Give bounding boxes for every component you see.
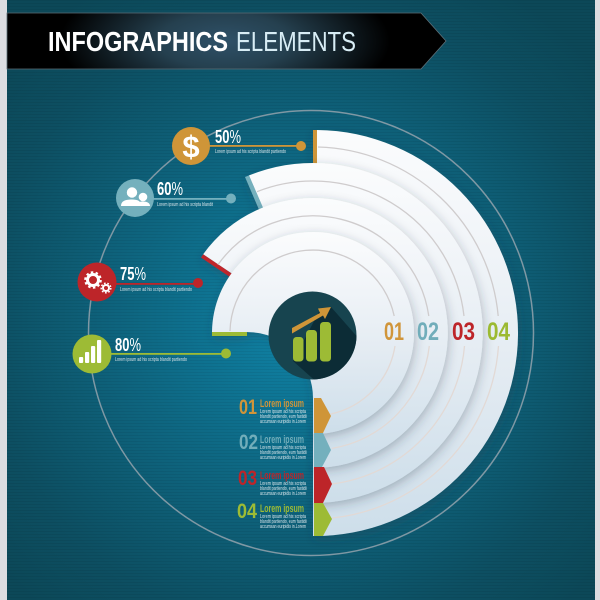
- callout: 75%: 75%: [120, 264, 146, 284]
- list item 01: Lorem ipsum: [260, 398, 304, 410]
- callout: 50%: $: [182, 129, 200, 164]
- list item 04: accumsan euripidis in.Lorem: [260, 524, 306, 530]
- list item 02: Lorem ipsum: [260, 434, 304, 446]
- ring number labels: 04: [487, 318, 510, 346]
- list item 02: blandit partiendo, eum fastidii: [260, 450, 307, 456]
- callout: 60%: [116, 179, 236, 217]
- list item 03: blandit partiendo, eum fastidii: [260, 486, 307, 492]
- callout: 60%: 60%: [157, 179, 183, 199]
- list item 04: [237, 500, 307, 530]
- callout: 75%: Lorem ipsum ad his scripta blandit partiendo: [120, 287, 192, 293]
- subtitle word: ELEMENTS: [236, 26, 356, 57]
- list item 01: blandit partiendo, eum fastidii: [260, 414, 307, 420]
- center icon: growth chart: [268, 292, 360, 385]
- ring 1: [212, 232, 414, 434]
- callout: 50%: 50%: [215, 127, 241, 147]
- title banner: [7, 13, 446, 69]
- list item 03: 03: [238, 467, 257, 490]
- list item 04: 04: [237, 500, 257, 523]
- list item 01: Lorem ipsum ad his scripta: [260, 409, 306, 415]
- list item 02: 02: [239, 431, 258, 454]
- list item 01: [239, 396, 307, 425]
- list item 01: accumsan euripidis in.Lorem: [260, 419, 306, 425]
- list item 04: Lorem ipsum ad his scripta: [260, 514, 306, 520]
- callout: 50%: Lorem ipsum ad his scripta blandit partiendo: [215, 149, 286, 155]
- list item 04: blandit partiendo, eum fastidii: [260, 519, 307, 525]
- list item 03: Lorem ipsum: [260, 470, 304, 482]
- ring 4: [313, 130, 518, 536]
- pointer tabs: [314, 398, 332, 536]
- list item 04: Lorem ipsum: [260, 503, 304, 515]
- ring 3: [245, 163, 483, 503]
- callout: 60%: Lorem ipsum ad his scripta blandit: [157, 202, 213, 208]
- outer thin circle: [88, 110, 534, 556]
- ring number labels: [384, 318, 510, 346]
- callout: 80%: 80%: [115, 335, 141, 355]
- list item 03: [238, 467, 307, 497]
- callout: 75%: [78, 262, 203, 302]
- callout: 50%: [172, 127, 306, 165]
- list item 02: [239, 431, 307, 461]
- callout: 80%: [72, 334, 231, 374]
- list item 01: 01: [239, 396, 257, 419]
- list item 02: Lorem ipsum ad his scripta: [260, 445, 306, 451]
- title: INFOGRAPHICS: [48, 26, 228, 57]
- ring 2: [201, 198, 448, 468]
- callout: 80%: Lorem ipsum ad his scripta blandit partiendo: [115, 357, 187, 363]
- list item 03: Lorem ipsum ad his scripta: [260, 481, 306, 487]
- ring number labels: 03: [452, 318, 475, 346]
- list item 02: accumsan euripidis in.Lorem: [260, 455, 306, 461]
- list item 03: accumsan euripidis in.Lorem: [260, 491, 306, 497]
- ring guide lines: [218, 147, 498, 518]
- ring number labels: 01: [384, 318, 404, 346]
- ring number labels: 02: [417, 318, 439, 346]
